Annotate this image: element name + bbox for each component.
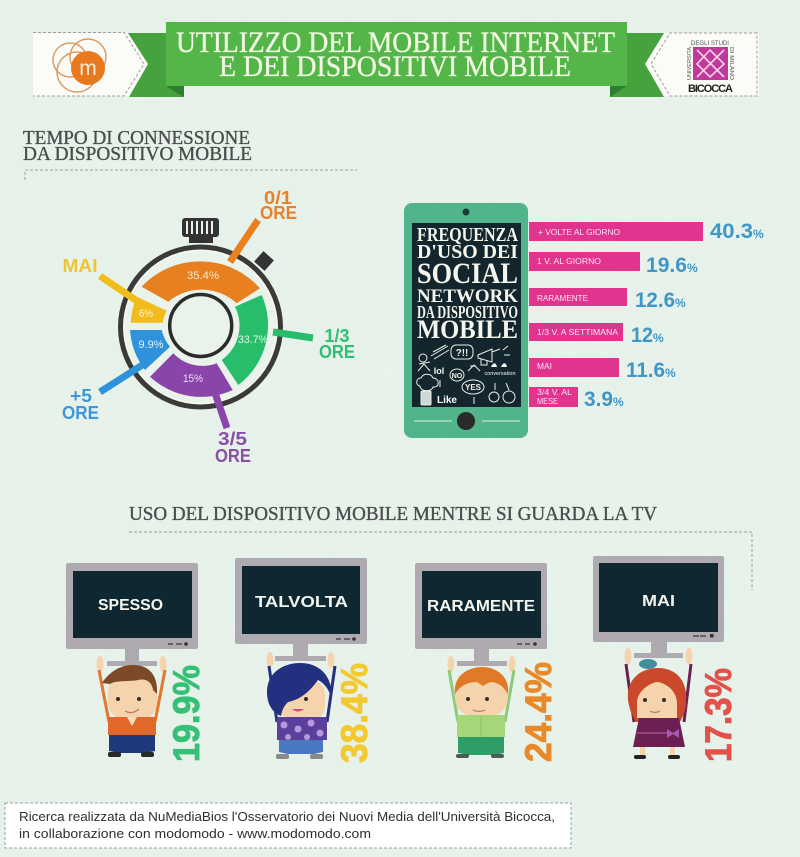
segment: 0/1 ore 35.4%: ORE xyxy=(260,203,297,223)
bar: mai: % xyxy=(665,366,676,380)
character: ragazza blu xyxy=(266,652,335,759)
icon: modomodo logo: m xyxy=(79,57,97,80)
bar: 1 v. al giorno: 19.6 xyxy=(646,254,687,277)
bar: mai: 11.6 xyxy=(626,359,665,382)
heading: tempo di connessione: TEMPO DI CONNESSIONE xyxy=(23,127,250,149)
bar: raramente: 12.6 xyxy=(635,289,675,312)
header xyxy=(33,22,759,97)
title banner xyxy=(166,22,627,86)
bar: 3/4 v. al mese: 3.9 xyxy=(584,388,613,411)
heading: tempo di connessione xyxy=(23,127,252,165)
segment: 1/3 ore 33.7%: 1/3 xyxy=(324,326,350,346)
tv: mai xyxy=(593,556,724,658)
tv: talvolta: TALVOLTA xyxy=(255,594,349,611)
tv group: talvolta xyxy=(235,558,375,763)
ribbon tails xyxy=(128,33,664,97)
phone screen title xyxy=(417,224,518,344)
phone screen title: D'USO DEI xyxy=(417,241,518,263)
icon: Bicocca logo: UNIVERSITA xyxy=(687,46,693,80)
bar chart: frequenza xyxy=(529,220,764,411)
icon: Bicocca logo: DI MILANO xyxy=(728,47,734,80)
segment: 1/3 ore 33.7%: 33.7% xyxy=(238,334,268,346)
segment: 3/5 ore 15%: ORE xyxy=(215,446,251,466)
bar: 1/3 v. a settimana xyxy=(529,323,664,347)
bar: 1/3 v. a settimana: % xyxy=(653,331,664,345)
icon: stopwatch body xyxy=(120,218,280,407)
segment: +5 ore 9.9%: 9.9% xyxy=(138,339,164,351)
icons: social doodles: conversation xyxy=(484,371,516,377)
icons: social doodles: Like xyxy=(437,395,457,406)
bar: 3/4 v. al mese: MESE xyxy=(537,397,558,406)
character: ragazzo verde xyxy=(448,656,516,758)
bar: 1 v. al giorno: 1 V. AL GIORNO xyxy=(537,257,601,266)
segment: mai 6%: MAI xyxy=(62,256,98,276)
bar: 1/3 v. a settimana: 12 xyxy=(631,324,653,347)
footer note xyxy=(5,803,571,848)
stopwatch chart xyxy=(62,188,355,466)
segment: 1/3 ore 33.7% xyxy=(222,295,355,385)
segment: 1/3 ore 33.7%: ORE xyxy=(319,342,355,362)
bar: + volte al giorno: 40.3 xyxy=(710,220,753,243)
bar: mai: MAI xyxy=(537,362,552,371)
bar: 3/4 v. al mese: 3/4 V. AL xyxy=(537,388,573,397)
bar: raramente: RARAMENTE xyxy=(537,294,588,303)
icon: Bicocca logo: DEGLI STUDI xyxy=(691,41,729,47)
bar: raramente: % xyxy=(675,296,686,310)
tv group: spesso xyxy=(66,563,207,762)
heading: uso durante la tv: USO DEL DISPOSITIVO MOBILE MENTRE SI GUARDA LA TV xyxy=(129,503,658,525)
segment: mai 6%: 6% xyxy=(139,308,153,320)
segment: +5 ore 9.9% xyxy=(62,330,170,423)
segment: 0/1 ore 35.4%: 35.4% xyxy=(187,270,219,282)
segment: 3/5 ore 15%: 3/5 xyxy=(218,429,247,449)
icons: social doodles: NO xyxy=(452,373,463,380)
icons: social doodles xyxy=(417,345,516,406)
tv: spesso xyxy=(66,563,198,666)
tv group: raramente xyxy=(415,563,559,762)
segment: mai 6% xyxy=(62,256,167,323)
phone screen title: DA DISPOSITIVO xyxy=(417,302,518,322)
tv: raramente xyxy=(415,563,547,666)
bar: 3/4 v. al mese xyxy=(529,387,624,411)
footer note: in collaborazione con modomodo - www.modomodo.com xyxy=(19,826,371,841)
phone: frequenza d'uso xyxy=(404,203,528,438)
icons: social doodles: YES xyxy=(465,383,482,392)
bar: 1/3 v. a settimana: 1/3 V. A SETTIMANA xyxy=(537,328,619,337)
bar: + volte al giorno: % xyxy=(753,227,764,241)
heading: tempo di connessione: DA DISPOSITIVO MOBILE xyxy=(23,143,252,165)
bar: 1 v. al giorno xyxy=(529,252,698,277)
bar: 3/4 v. al mese: % xyxy=(613,395,624,409)
phone screen title: NETWORK xyxy=(417,286,518,307)
bar: mai xyxy=(529,358,676,382)
bar: 1 v. al giorno: % xyxy=(687,261,698,275)
title banner: E DEI DISPOSITIVI MOBILE xyxy=(219,50,571,83)
segment: 3/5 ore 15%: 15% xyxy=(183,373,203,385)
value: 19.9%: 19.9% xyxy=(166,665,207,762)
tv: raramente: RARAMENTE xyxy=(427,598,535,615)
bar: + volte al giorno: + VOLTE AL GIORNO xyxy=(538,228,620,237)
phone screen title: SOCIAL xyxy=(417,257,518,290)
logo panel: modomodo xyxy=(33,32,148,96)
icons: social doodles: ?!! xyxy=(456,348,468,359)
title banner: UTILIZZO DEL MOBILE INTERNET xyxy=(176,26,615,59)
icons: social doodles: lol xyxy=(434,366,444,376)
logo panel: Bicocca xyxy=(645,33,759,96)
tv: talvolta xyxy=(235,558,367,661)
tv: spesso: SPESSO xyxy=(98,597,163,614)
phone screen title: MOBILE xyxy=(417,315,518,344)
value: 17.3%: 17.3% xyxy=(698,668,739,762)
value: 24.4%: 24.4% xyxy=(518,662,559,762)
tv: mai: MAI xyxy=(642,593,675,610)
segment: +5 ore 9.9%: ORE xyxy=(62,403,99,423)
icon: Bicocca logo: BICOCCA xyxy=(688,83,733,95)
segment: +5 ore 9.9%: +5 xyxy=(70,386,92,406)
segment: 3/5 ore 15% xyxy=(150,353,251,466)
bar: + volte al giorno xyxy=(529,220,764,243)
phone screen title: FREQUENZA xyxy=(417,224,518,246)
tv group: mai xyxy=(593,556,739,762)
footer note: Ricerca realizzata da NuMediaBios l'Osservatorio dei Nuovi Media dell'Università Bicocca, xyxy=(19,809,555,824)
bar: raramente xyxy=(529,288,686,312)
value: 38.4%: 38.4% xyxy=(334,663,375,763)
segment: 0/1 ore 35.4% xyxy=(142,188,297,303)
character: ragazza rossa xyxy=(624,648,692,759)
icon: Bicocca logo xyxy=(687,41,734,95)
segment: 0/1 ore 35.4%: 0/1 xyxy=(264,188,292,208)
character: ragazzo xyxy=(96,656,166,757)
